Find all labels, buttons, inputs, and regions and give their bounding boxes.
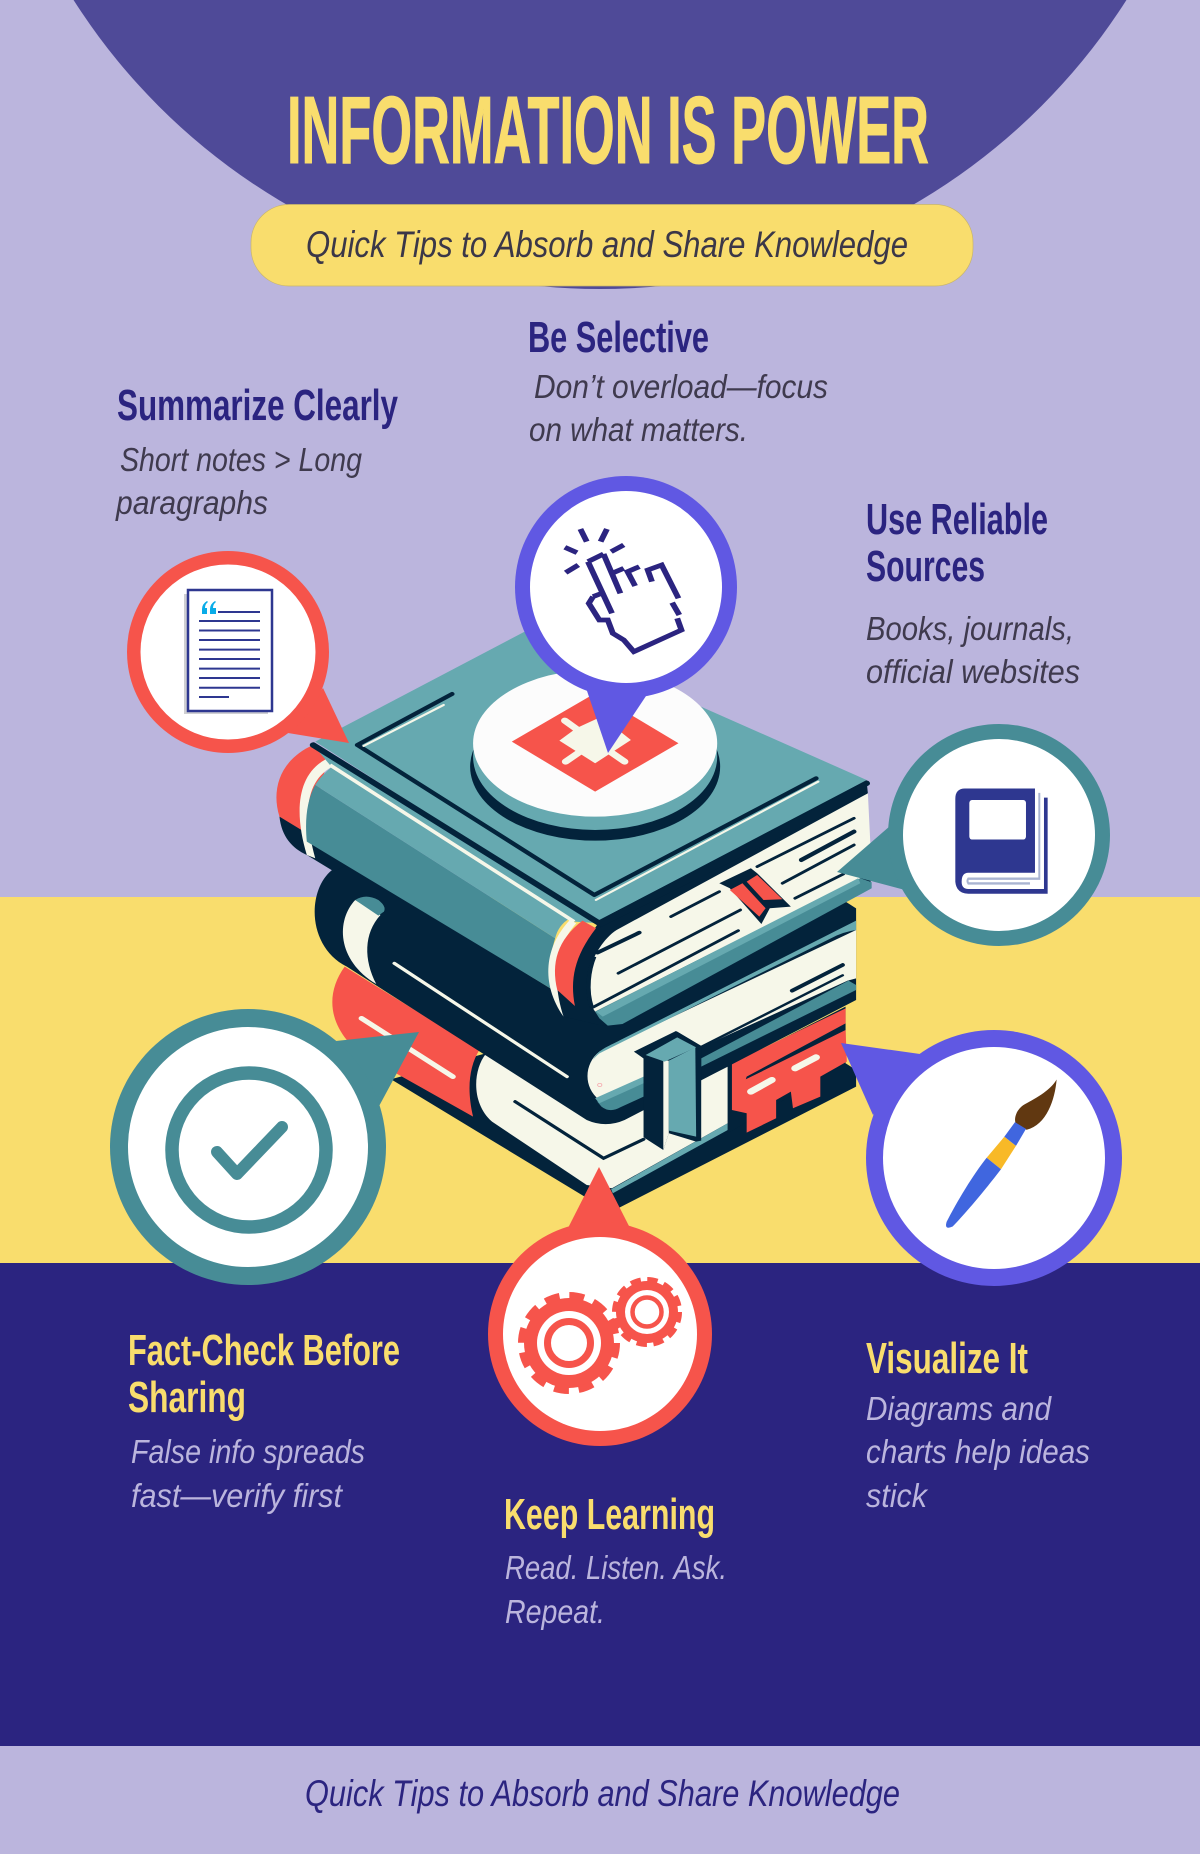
text block: Fact-Check Before Sharing (128, 1326, 400, 1514)
text block: Use Reliable Sources: official websites (866, 653, 1080, 690)
text block: Keep Learning: Repeat. (505, 1593, 605, 1630)
subtitle pill: Quick Tips to Absorb and Share Knowledge (306, 224, 908, 265)
text block: Visualize It: charts help ideas (866, 1433, 1090, 1470)
text block: Visualize It: Visualize It (866, 1334, 1028, 1383)
text block: Be Selective (528, 313, 828, 448)
text block: Summarize Clearly: paragraphs (115, 484, 268, 521)
text block: Use Reliable Sources: Sources (866, 542, 985, 591)
callout: Visualize It paintbrush icon (841, 1030, 1122, 1286)
text block: Keep Learning (504, 1490, 727, 1630)
text block: Keep Learning: Keep Learning (504, 1490, 715, 1539)
text block: Fact-Check Before Sharing: False info spreads (131, 1433, 365, 1470)
text block: Summarize Clearly: Summarize Clearly (117, 381, 398, 430)
callout: Summarize Clearly document icon (127, 551, 349, 753)
text block: Use Reliable Sources: Books, journals, (866, 610, 1074, 647)
book: top teal (276, 630, 872, 1027)
callout: Fact-Check check mark icon (110, 1009, 419, 1285)
book: bottom red and middle navy (315, 850, 856, 1209)
text block: Visualize It (866, 1334, 1090, 1514)
text block: Fact-Check Before Sharing: fast—verify first (131, 1477, 344, 1514)
text block: Be Selective: on what matters. (529, 411, 748, 448)
callout: Be Selective hand cursor icon (515, 476, 737, 753)
subtitle pill (251, 204, 973, 286)
illustration: stack of books (276, 630, 872, 1209)
text block: Use Reliable Sources: Use Reliable (866, 495, 1048, 544)
text block: Keep Learning: Read. Listen. Ask. (505, 1549, 727, 1586)
text block: Summarize Clearly: Short notes > Long (120, 441, 363, 478)
text block: Visualize It: stick (866, 1477, 928, 1514)
callout: Use Reliable Sources book icon (837, 724, 1110, 946)
text block: Use Reliable Sources (866, 495, 1080, 690)
header semicircle (0, 0, 1200, 289)
text block: Summarize Clearly (115, 381, 398, 521)
text block: Be Selective: Be Selective (528, 313, 709, 362)
text block: Fact-Check Before Sharing: Sharing (128, 1373, 246, 1422)
callout: Keep Learning gears icon (488, 1167, 712, 1446)
text block: Fact-Check Before Sharing: Fact-Check Before (128, 1326, 400, 1375)
text block: Visualize It: Diagrams and (866, 1390, 1052, 1427)
footer text: Quick Tips to Absorb and Share Knowledge (305, 1773, 900, 1814)
text block: Be Selective: Don’t overload—focus (534, 368, 828, 405)
